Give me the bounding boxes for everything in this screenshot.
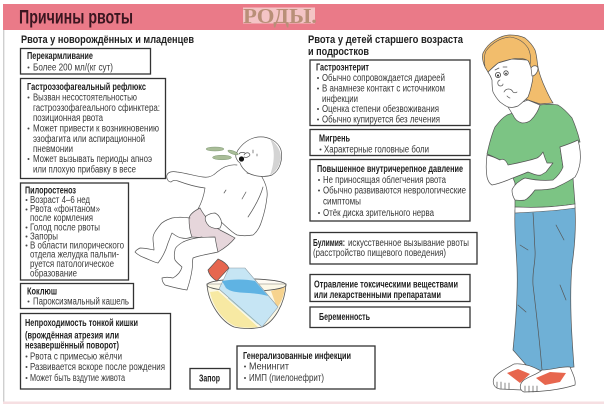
box: gastroenteritis: Обычно сопровождается диареей (322, 73, 445, 84)
box: gastroenteritis (310, 60, 470, 126)
box: overfeeding: Более 200 мл/(кг сут) (33, 62, 113, 74)
box: gastroenteritis: Обычно купируется без лечения (322, 114, 440, 126)
girl waistband (515, 204, 575, 213)
box: poisoning (310, 274, 470, 302)
title: Причины рвоты (19, 6, 133, 28)
girl arms and hands (486, 152, 553, 185)
box: small bowel obstruction: (врождённая атрезия или (25, 330, 119, 342)
box: pyloric stenosis: образование (30, 268, 77, 280)
box: pyloric stenosis: Запоры (30, 232, 58, 242)
box: raised intracranial pressure: Отёк диска зрительного нерва (323, 208, 434, 219)
girl fringe (484, 37, 531, 72)
baby diaper (189, 208, 235, 252)
box: raised intracranial pressure (310, 160, 470, 221)
box: pyloric stenosis (20, 183, 128, 280)
box: pyloric stenosis: руется патологическое (30, 259, 114, 270)
header banner (3, 4, 604, 30)
box: bulimia: (расстройство пищевого поведения) (313, 248, 446, 259)
girl ear (531, 66, 538, 76)
bottle (219, 268, 278, 327)
bowl (207, 284, 286, 328)
box: raised intracranial pressure: Обычно развиваются неврологические (323, 186, 466, 196)
heading: newborns: Рвота у новорождённых и младенцев (21, 34, 194, 46)
box: migraine (310, 130, 470, 156)
girl shirt (487, 104, 580, 207)
box: generalized infections: ИМП (пиелонефрит) (249, 373, 324, 384)
illustration: girl holding stomach (482, 35, 580, 392)
box: raised intracranial pressure: Повышенное внутричерепное давление (317, 164, 463, 175)
box: generalized infections: Генерализованные инфекции (243, 351, 351, 362)
box: pyloric stenosis: Голод после рвоты (30, 222, 100, 234)
girl jeans (513, 207, 575, 371)
box: pregnancy (310, 307, 470, 328)
box: pyloric stenosis: Рвота «фонтаном» (30, 204, 100, 215)
box: whooping cough: Коклюш (27, 286, 57, 298)
heading: older children (308, 34, 464, 58)
box: constipation (190, 368, 230, 389)
box: GERD: Может вызывать периоды апноэ (33, 154, 152, 165)
box: pyloric stenosis: Возраст 4–6 нед (30, 195, 90, 206)
box: pyloric stenosis: В области пилорического (30, 240, 124, 252)
box: GERD: Гастроэзофагеальный рефлюкс (27, 82, 146, 93)
box: gastroenteritis: В анамнезе контакт с источником (322, 84, 445, 94)
box: small bowel obstruction: незавершённый поворот) (25, 340, 119, 352)
box: migraine: Мигрень (319, 134, 350, 144)
girl shoes (493, 364, 575, 392)
panel: older children and adolescents (308, 34, 477, 328)
box: small bowel obstruction: Может быть вздутие живота (30, 373, 125, 384)
girl hair back (482, 35, 553, 104)
baby face (239, 150, 257, 162)
box: pyloric stenosis: отдела желудка пальпи- (30, 250, 119, 260)
girl head (488, 59, 533, 107)
girl neck (508, 100, 540, 123)
box: raised intracranial pressure: симптомы (323, 196, 361, 208)
box: pregnancy: Беременность (319, 312, 370, 323)
box: generalized infections (237, 346, 375, 389)
box: bulimia: Булимия: (313, 238, 345, 249)
box: constipation: Запор (199, 374, 220, 384)
illustration: bottle in a bowl (207, 259, 286, 328)
heading: older children: и подростков (308, 46, 369, 58)
box: pyloric stenosis: после кормления (30, 213, 93, 224)
box: gastroenteritis: инфекции (322, 94, 358, 105)
box: gastroenteritis: Гастроэнтерит (316, 62, 369, 74)
box: small bowel obstruction: Рвота с примесью жёлчи (30, 352, 122, 362)
bottle cap (208, 259, 229, 281)
baby head (236, 137, 282, 176)
baby hand on belly (205, 213, 222, 228)
box: GERD: пневмонии (33, 144, 73, 155)
box: GERD: гастроэзофагеального сфинктера: (33, 103, 160, 114)
logo: РОДЫ. (243, 4, 317, 28)
box: gastroenteritis: Оценка степени обезвоживания (322, 104, 439, 115)
box: small bowel obstruction: Развивается вскоре после рождения (30, 362, 165, 373)
vomit spurts (206, 147, 239, 160)
box: GERD: или плохую прибавку в весе (33, 164, 136, 176)
box: bulimia: искусственное вызывание рвоты (348, 238, 469, 249)
box: GERD (20, 78, 166, 178)
box: poisoning: или лекарственными препаратами (314, 290, 441, 301)
box: GERD: Может привести к возникновению (33, 124, 159, 134)
box: whooping cough: Пароксизмальный кашель (33, 296, 129, 308)
box: GERD: позиционная рвота (33, 113, 103, 124)
box: poisoning: Отравление токсическими веществами (314, 280, 458, 290)
box: small bowel obstruction (20, 314, 170, 389)
box: raised intracranial pressure: Не приносящая облегчения рвота (323, 175, 446, 186)
box: GERD: Вызван несостоятельностью (33, 92, 137, 104)
box: overfeeding: Перекармливание (27, 51, 93, 62)
box: small bowel obstruction: Непроходимость тонкой кишки (25, 318, 138, 329)
box: migraine: Характерные головные боли (324, 144, 429, 156)
baby legs (135, 217, 192, 263)
heading: older children: Рвота у детей старшего возраста (308, 34, 464, 46)
box: pyloric stenosis: Пилоростеноз (25, 186, 76, 196)
illustration: vomiting baby (135, 137, 282, 290)
box: generalized infections: Менингит (249, 362, 289, 372)
girl face (495, 67, 517, 98)
panel: newborns and infants (20, 34, 194, 389)
box: whooping cough (20, 284, 134, 308)
box: overfeeding (20, 48, 150, 74)
box: bulimia (310, 232, 477, 264)
baby torso and arm (167, 165, 267, 236)
box: GERD: эзофагита или аспирационной (33, 134, 145, 145)
